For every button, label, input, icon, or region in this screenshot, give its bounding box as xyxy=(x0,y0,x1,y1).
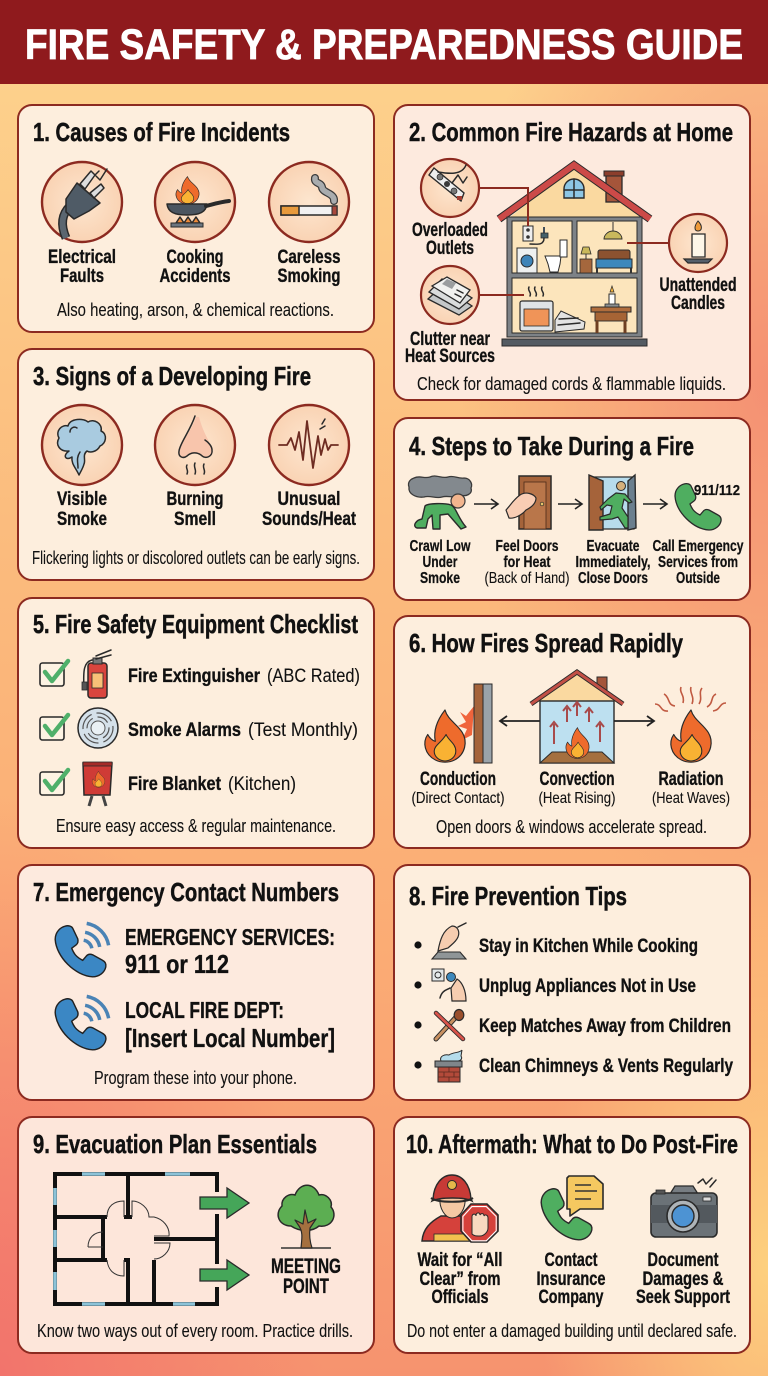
icon: fire extinguisher xyxy=(82,650,111,698)
label: feel doors for heat: Feel Doors xyxy=(496,538,559,555)
icon: visible smoke xyxy=(42,405,122,485)
label: careless smoking xyxy=(278,247,340,287)
title banner xyxy=(0,0,768,84)
tip: unplug appliances: Unplug Appliances Not in Use xyxy=(479,976,696,997)
label: meeting point: POINT xyxy=(283,1275,329,1298)
tip: stay in kitchen xyxy=(414,923,698,959)
arrow: exit 2 xyxy=(200,1260,249,1290)
icon: radiation flame with heat waves xyxy=(655,687,726,762)
icon: smoke alarm xyxy=(78,708,118,748)
icon: evacuate through door xyxy=(589,475,636,530)
label: overloaded outlets: Overloaded xyxy=(412,220,488,241)
label: visible smoke: Visible xyxy=(57,489,107,510)
row: smoke alarms xyxy=(40,708,358,748)
heading: spread: 6. How Fires Spread Rapidly xyxy=(409,628,683,658)
label: convection: Convection xyxy=(540,769,614,790)
label: clutter near heat sources: Clutter near xyxy=(410,329,490,350)
text: local fire department: LOCAL FIRE DEPT: xyxy=(125,997,284,1023)
text: fire blanket xyxy=(128,774,296,795)
tip: stay in kitchen: Stay in Kitchen While Cooking xyxy=(479,936,698,957)
text: emergency services: 911 or 112 xyxy=(125,949,229,979)
label: unattended candles: Unattended xyxy=(660,275,736,296)
label: conduction xyxy=(412,769,504,807)
icon: overloaded outlets xyxy=(421,159,479,217)
label: careless smoking: Smoking xyxy=(278,266,340,287)
label: electrical faults: Faults xyxy=(60,266,104,287)
text: smoke alarms: (Test Monthly) xyxy=(248,720,358,741)
label: contact insurance company: Contact xyxy=(544,1250,598,1271)
illustration: house cross-section xyxy=(499,165,650,346)
icon: camera xyxy=(651,1178,717,1237)
icon: crawling under smoke xyxy=(408,476,472,529)
label: unusual sounds and heat xyxy=(262,489,357,530)
label: overloaded outlets xyxy=(412,220,488,259)
label: wait for all clear: Clear” from xyxy=(420,1269,500,1290)
label: evacuate immediately: Immediately, xyxy=(576,554,650,571)
label: wait for all clear xyxy=(418,1250,502,1308)
icon: hand feeling door xyxy=(506,476,551,529)
label: unattended candles: Candles xyxy=(671,293,725,314)
panel: evacuation plan essentials xyxy=(18,1117,374,1353)
icon: chimney with smoke xyxy=(435,1050,462,1082)
icon: fire blanket xyxy=(83,762,112,806)
label: crawl low under smoke: Under xyxy=(422,554,458,571)
heading: equipment: 5. Fire Safety Equipment Checklist xyxy=(33,609,358,639)
icon: green phone 911/112 xyxy=(675,482,740,530)
row: fire extinguisher xyxy=(40,650,360,698)
label: clutter near heat sources: Heat Sources xyxy=(405,346,495,367)
heading: signs: 3. Signs of a Developing Fire xyxy=(33,361,311,391)
arrow: step 2 to 3 xyxy=(558,499,582,509)
text: fire extinguisher xyxy=(128,666,360,687)
note: signs: Flickering lights or discolored outlets can be early signs. xyxy=(32,548,360,568)
label: wait for all clear: Wait for “All xyxy=(418,1250,502,1271)
label: overloaded outlets: Outlets xyxy=(426,238,474,259)
panel: common fire hazards at home xyxy=(394,105,750,400)
arrow: step 1 to 2 xyxy=(474,499,498,509)
floor plan xyxy=(53,1172,219,1306)
label: call emergency services xyxy=(652,538,744,587)
label: careless smoking: Careless xyxy=(278,247,340,268)
icon: green phone 911/112: 911/112 xyxy=(694,482,740,499)
arrow: step 3 to 4 xyxy=(643,499,667,509)
icon: blue phone 2 xyxy=(55,996,109,1050)
label: convection xyxy=(538,769,616,807)
label: radiation: (Heat Waves) xyxy=(652,790,730,807)
label: burning smell: Burning xyxy=(166,489,224,510)
label: crawl low under smoke: Crawl Low xyxy=(410,538,471,555)
label: electrical faults: Electrical xyxy=(48,247,116,268)
label: document damages xyxy=(636,1250,731,1308)
heading: contacts: 7. Emergency Contact Numbers xyxy=(33,877,339,907)
label: visible smoke: Smoke xyxy=(57,509,107,530)
icon: convection house xyxy=(531,672,623,763)
panel: aftermath xyxy=(394,1117,750,1353)
icon: phone and speech bubble xyxy=(541,1176,603,1240)
icon: blue phone 1 xyxy=(55,923,109,977)
text: emergency services xyxy=(125,924,335,979)
note: causes: Also heating, arson, & chemical reactions. xyxy=(57,300,334,320)
icon: conduction flame and wall xyxy=(425,684,492,763)
tip: unplug appliances xyxy=(414,969,696,1001)
text: local fire department xyxy=(125,997,335,1053)
label: burning smell: Smell xyxy=(174,509,216,530)
heading: causes: 1. Causes of Fire Incidents xyxy=(33,117,290,147)
label: feel doors for heat: for Heat xyxy=(504,554,551,571)
label: meeting point: MEETING xyxy=(271,1255,341,1278)
label: wait for all clear: Officials xyxy=(432,1287,488,1308)
icon: hand on stove knob xyxy=(432,923,466,959)
check: smoke alarms xyxy=(40,715,68,740)
heading: evacuation: 9. Evacuation Plan Essentials xyxy=(33,1129,317,1159)
label: evacuate immediately: Evacuate xyxy=(586,538,640,555)
label: call emergency services: Outside xyxy=(676,570,720,587)
icon: cigarette xyxy=(269,162,349,242)
panel: how fires spread rapidly xyxy=(394,616,750,848)
text: fire extinguisher: Fire Extinguisher xyxy=(128,666,261,687)
label: visible smoke xyxy=(57,489,107,530)
icon: unattended candle xyxy=(669,214,727,272)
tip: keep matches away xyxy=(414,1010,731,1039)
panel: causes of fire incidents xyxy=(18,105,374,332)
label: clutter near heat sources xyxy=(405,329,495,367)
check: fire blanket xyxy=(40,770,68,795)
label: contact insurance company xyxy=(536,1250,606,1308)
text: smoke alarms xyxy=(128,720,358,741)
label: convection: (Heat Rising) xyxy=(538,790,616,807)
text: emergency services: EMERGENCY SERVICES: xyxy=(125,924,335,950)
panel: signs of a developing fire xyxy=(18,349,374,580)
icon: newspaper clutter xyxy=(421,266,479,324)
label: cooking accidents: Accidents xyxy=(160,266,230,287)
check: extinguisher xyxy=(40,661,68,686)
label: conduction: (Direct Contact) xyxy=(412,790,504,807)
arrow: to conduction xyxy=(500,716,540,726)
icon: frying pan on burner xyxy=(155,162,235,242)
text: fire extinguisher: (ABC Rated) xyxy=(267,666,360,687)
icon: electrical plug xyxy=(42,162,122,242)
icon: hand unplugging xyxy=(432,969,466,1001)
note: spread: Open doors & windows accelerate spread. xyxy=(436,817,707,837)
note: contacts: Program these into your phone. xyxy=(94,1068,297,1088)
icon: crossed matches xyxy=(436,1010,464,1039)
label: conduction: Conduction xyxy=(420,769,496,790)
connector lines xyxy=(479,188,669,295)
label: radiation: Radiation xyxy=(658,769,724,790)
heading: steps: 4. Steps to Take During a Fire xyxy=(409,431,694,461)
label: burning smell xyxy=(166,489,224,530)
arrow: to radiation xyxy=(614,716,654,726)
label: cooking accidents xyxy=(160,247,230,287)
label: document damages: Seek Support xyxy=(636,1287,731,1308)
label: evacuate immediately: Close Doors xyxy=(578,570,648,587)
panel: fire safety equipment checklist xyxy=(18,598,374,848)
label: meeting point xyxy=(271,1255,341,1298)
label: cooking accidents: Cooking xyxy=(166,247,224,268)
tip: clean chimneys xyxy=(414,1050,733,1082)
panel: emergency contact numbers xyxy=(18,865,374,1100)
label: contact insurance company: Company xyxy=(538,1287,604,1308)
note: equipment: Ensure easy access & regular maintenance. xyxy=(56,816,336,836)
icon: unusual sounds waveform xyxy=(269,405,349,485)
text: local fire department: [Insert Local Number] xyxy=(125,1023,335,1053)
label: feel doors for heat: (Back of Hand) xyxy=(484,570,570,587)
label: feel doors for heat xyxy=(484,538,570,587)
text: fire blanket: (Kitchen) xyxy=(228,774,296,795)
panel: fire prevention tips xyxy=(394,865,750,1100)
label: unusual sounds and heat: Unusual xyxy=(278,489,340,510)
label: radiation xyxy=(652,769,730,807)
label: document damages: Damages & xyxy=(642,1269,724,1290)
icon: firefighter with stop sign xyxy=(422,1175,498,1242)
panel: steps to take during a fire xyxy=(394,418,750,600)
note: evacuation: Know two ways out of every room. Practice drills. xyxy=(37,1321,353,1341)
label: evacuate immediately xyxy=(576,538,650,587)
label: contact insurance company: Insurance xyxy=(536,1269,606,1290)
heading: prevention: 8. Fire Prevention Tips xyxy=(409,881,627,911)
text: fire blanket: Fire Blanket xyxy=(128,774,222,795)
label: document damages: Document xyxy=(648,1250,719,1271)
label: electrical faults xyxy=(48,247,116,287)
icon: meeting point tree xyxy=(278,1185,334,1248)
label: crawl low under smoke xyxy=(410,538,471,587)
row: fire blanket xyxy=(40,762,296,806)
label: call emergency services: Services from xyxy=(658,554,738,571)
label: crawl low under smoke: Smoke xyxy=(420,570,460,587)
arrow: exit 1 xyxy=(200,1188,249,1218)
label: unattended candles xyxy=(660,275,736,314)
text: smoke alarms: Smoke Alarms xyxy=(128,720,241,741)
label: unusual sounds and heat: Sounds/Heat xyxy=(262,509,357,530)
icon: nose xyxy=(155,405,235,485)
